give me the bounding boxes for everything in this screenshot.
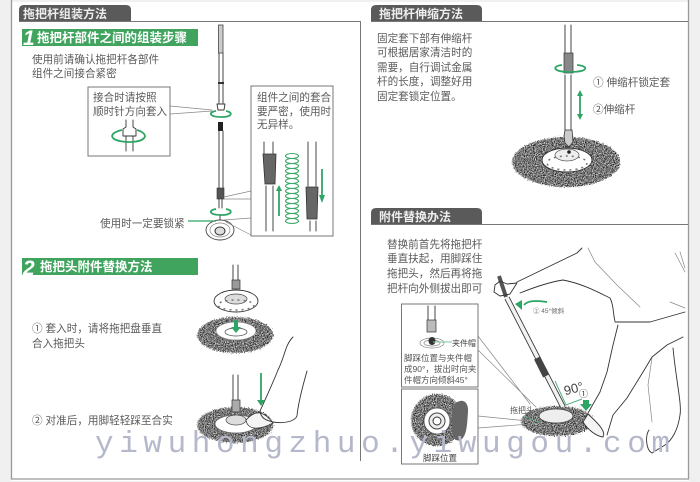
heading: attachment replacement — [371, 208, 482, 224]
text: telescopic description — [377, 32, 473, 103]
callout: tight fitting — [224, 86, 333, 236]
inset: foot position — [402, 389, 530, 464]
text: replacement description: 垂直扶起，用脚踩住 — [387, 252, 483, 265]
text: replacement description — [387, 238, 483, 295]
illustration: disc above mop head — [214, 265, 258, 312]
inset: cap position: 件帽方向倾斜45° — [404, 375, 468, 385]
heading: telescopic method: 拖把杆伸缩方法 — [379, 6, 463, 21]
step 1 banner: 1 — [23, 27, 35, 50]
text: telescopic description: 需要，自行调试金属 — [377, 61, 472, 74]
label: mop head — [510, 405, 540, 423]
label: lock when using — [100, 217, 216, 230]
text: step 1 instruction: ① 套入时，请将拖把盘垂直 — [32, 322, 162, 335]
annotation: 90 degree angle and press — [555, 379, 592, 411]
text: check components: 组件之间接合紧密 — [32, 67, 117, 80]
callout: clockwise fitting — [88, 87, 212, 156]
text: telescopic description: 固定套锁定位置。 — [377, 90, 462, 103]
annotation: tilt 45 degrees: ② 45°倾斜 — [533, 306, 565, 315]
inset: foot position: 脚踩位置 — [423, 453, 458, 463]
inset: cap position: 成90°，拔出时向夹 — [404, 364, 477, 374]
step 1 banner: 拖把杆部件之间的组装步骤 — [37, 30, 187, 45]
annotation: 90 degree angle and press: 90° — [562, 379, 585, 398]
step 2 banner: 拖把头附件替换方法 — [40, 259, 153, 274]
step 2 banner — [22, 257, 198, 280]
illustration: foot pressing mop head — [197, 337, 307, 443]
callout: clockwise fitting: 顺时针方向套入 — [93, 105, 168, 118]
heading: assembly method — [19, 5, 131, 21]
labels: telescopic parts: ②伸缩杆 — [593, 103, 636, 116]
labels: telescopic parts: ① 伸缩杆锁定套 — [593, 76, 671, 89]
text: check components — [32, 53, 160, 80]
text: telescopic description: 杆的长度，调整好用 — [377, 75, 472, 88]
text: step 1 instruction — [32, 322, 162, 350]
callout: clockwise fitting: 接合时请按照 — [93, 91, 157, 104]
heading: telescopic method — [371, 5, 482, 21]
watermark: yiwuhongzhuo.yiwugou.com — [95, 427, 670, 462]
inset: cap position — [402, 304, 536, 407]
inset: cap position: 夹件帽 — [452, 338, 476, 348]
text: replacement description: 替换前首先将拖把杆 — [387, 238, 483, 251]
text: replacement description: 把杆向外侧拔出即可 — [387, 282, 483, 295]
illustration: telescopic mop — [512, 25, 620, 187]
text: check components: 使用前请确认拖把杆各部件 — [32, 53, 160, 66]
heading: attachment replacement: 附件替换办法 — [379, 209, 451, 224]
illustration: person removing mop pole — [494, 248, 685, 453]
heading: assembly method: 拖把杆组装方法 — [23, 6, 107, 21]
text: step 1 instruction: 合入拖把头 — [32, 337, 85, 350]
labels: telescopic parts — [593, 76, 671, 116]
text: telescopic description: 可根据居家清洁时的 — [377, 46, 472, 59]
annotation: 90 degree angle and press: ① — [579, 389, 588, 399]
illustration: assembled pole — [206, 25, 234, 240]
annotation: tilt 45 degrees — [515, 300, 565, 315]
illustration: mop head with arrow — [197, 317, 273, 353]
text: replacement description: 拖把头，然后再将拖 — [387, 267, 483, 280]
label: lock when using: 使用时一定要锁紧 — [100, 217, 185, 230]
inset: cap position: 脚踩位置与夹件帽 — [404, 353, 472, 363]
text: telescopic description: 固定套下部有伸缩杆 — [377, 32, 473, 45]
callout: tight fitting: 无异样。 — [257, 118, 299, 131]
text: step 2 instruction: ② 对准后，用脚轻轻踩至合实 — [32, 414, 173, 427]
step 1 banner — [22, 27, 198, 50]
callout: tight fitting: 组件之间的套合 — [257, 91, 332, 104]
label: mop head: 拖把头 — [510, 405, 534, 415]
step 2 banner: 2 — [22, 257, 35, 280]
callout: tight fitting: 要严密，使用时 — [257, 105, 332, 118]
